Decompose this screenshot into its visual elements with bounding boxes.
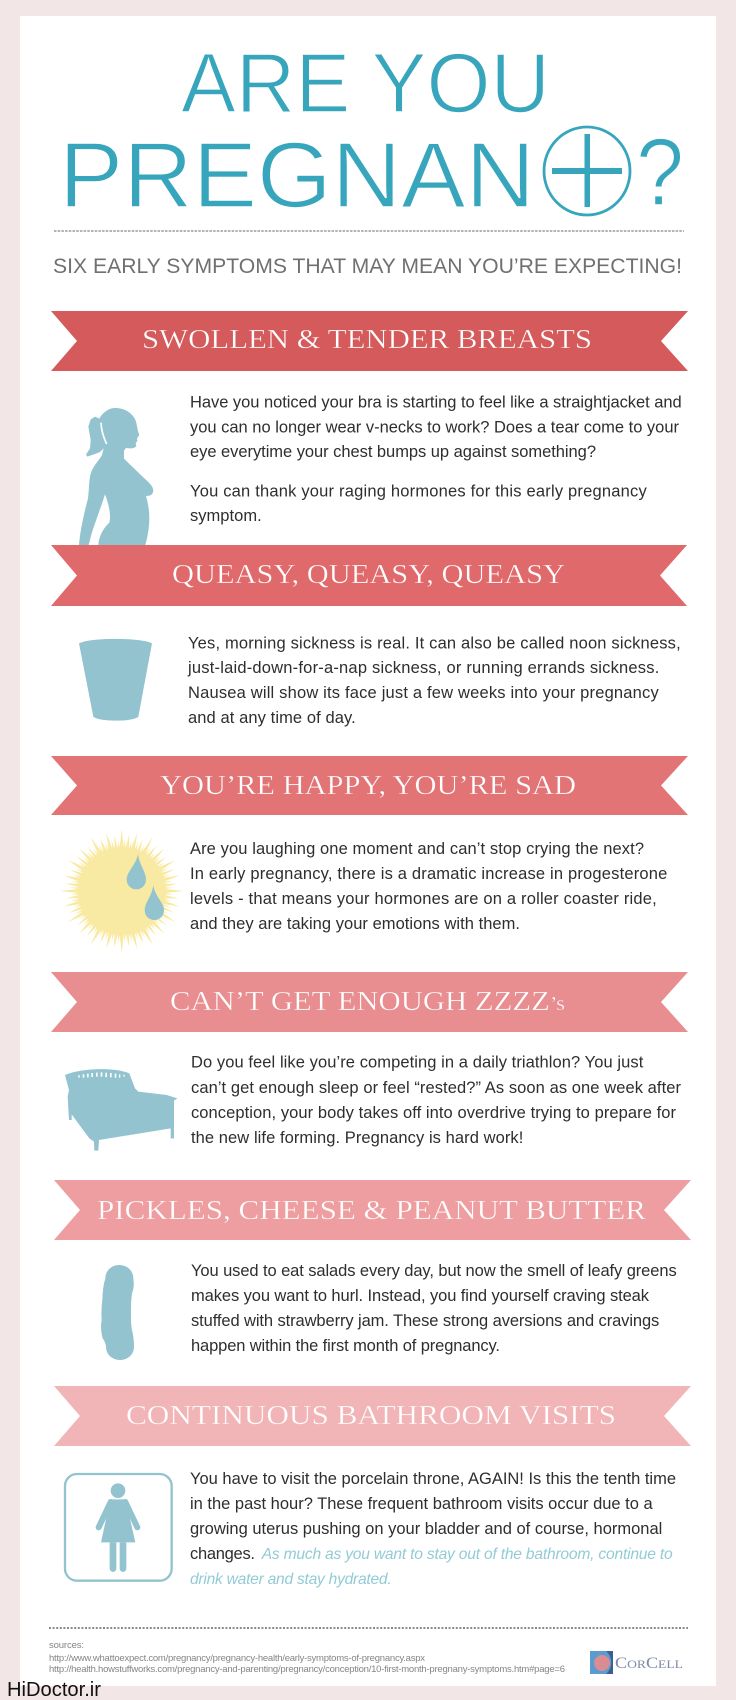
text block: Nausea will show its face just a few weeks into your pregnancy bbox=[188, 684, 659, 702]
text block bbox=[190, 1470, 676, 1588]
icon: pickle bbox=[101, 1265, 134, 1360]
tear drops bbox=[127, 854, 164, 920]
logo: CorCell bbox=[590, 1651, 683, 1674]
text block: eye everytime your chest bumps up against something? bbox=[190, 443, 596, 461]
text block: You can thank your raging hormones for this early pregnancy bbox=[190, 482, 647, 500]
text block bbox=[190, 840, 667, 933]
banner bbox=[54, 1386, 691, 1446]
text block bbox=[191, 1262, 677, 1355]
icon: plus in circle bbox=[544, 127, 630, 215]
logo: CorCell: CORCELL bbox=[615, 1655, 683, 1672]
text block: growing uterus pushing on your bladder and of course, hormonal bbox=[190, 1520, 662, 1538]
text block: and at any time of day. bbox=[188, 709, 356, 727]
text block: levels - that means your hormones are on a roller coaster ride, bbox=[190, 890, 657, 908]
banner: QUEASY, QUEASY, QUEASY bbox=[172, 559, 565, 589]
icon: cup bbox=[79, 639, 152, 721]
text block: in the past hour? These frequent bathroom visits occur due to a bbox=[190, 1495, 654, 1513]
text block bbox=[187, 634, 681, 727]
title: ? bbox=[636, 119, 684, 226]
panel: queasy bbox=[51, 545, 687, 727]
sources: sources: bbox=[49, 1640, 84, 1651]
icon: sun with tear drops bbox=[60, 829, 184, 953]
banner bbox=[51, 756, 688, 815]
icon: restroom sign bbox=[65, 1474, 172, 1581]
sources bbox=[49, 1640, 565, 1675]
banner bbox=[51, 545, 687, 606]
text block: Yes, morning sickness is real. It can also be called noon sickness, bbox=[188, 634, 681, 652]
text block: As much as you want to stay out of the bathroom, continue to bbox=[261, 1546, 673, 1563]
title: PREGNAN bbox=[59, 123, 535, 227]
panel: cravings bbox=[54, 1180, 691, 1360]
text block: symptom. bbox=[190, 507, 262, 525]
banner bbox=[54, 1180, 691, 1240]
text block: makes you want to hurl. Instead, you find yourself craving steak bbox=[191, 1287, 650, 1305]
panel: sleep bbox=[51, 972, 688, 1151]
sources: http://health.howstuffworks.com/pregnancy-and-parenting/pregnancy/conception/10-first-month-pregnany-symptoms.htm#page=6 bbox=[49, 1664, 565, 1675]
text block: you can no longer wear v-necks to work? Does a tear come to your bbox=[190, 418, 680, 436]
subtitle: SIX EARLY SYMPTOMS THAT MAY MEAN YOU’RE EXPECTING! bbox=[53, 255, 682, 278]
banner bbox=[51, 311, 688, 371]
title bbox=[59, 36, 684, 227]
banner bbox=[51, 972, 688, 1032]
sources: http://www.whattoexpect.com/pregnancy/pregnancy-health/early-symptoms-of-pregnancy.aspx bbox=[49, 1653, 425, 1664]
text block: and they are taking your emotions with them. bbox=[190, 915, 520, 933]
text block: changes. bbox=[190, 1545, 255, 1563]
text block: Do you feel like you’re competing in a daily triathlon? You just bbox=[191, 1054, 644, 1072]
text block: stuffed with strawberry jam. These strong aversions and cravings bbox=[191, 1312, 659, 1330]
banner: SWOLLEN & TENDER BREASTS bbox=[142, 324, 592, 354]
panel: happy and sad bbox=[51, 756, 688, 953]
text block bbox=[190, 394, 682, 525]
icon: pregnant silhouette bbox=[79, 408, 153, 545]
panel: swollen and tender breasts bbox=[51, 311, 688, 545]
text block: happen within the first month of pregnancy. bbox=[191, 1337, 500, 1355]
text block: can’t get enough sleep or feel “rested?” As soon as one week after bbox=[191, 1079, 682, 1097]
banner: YOU’RE HAPPY, YOU’RE SAD bbox=[160, 770, 576, 800]
banner: CONTINUOUS BATHROOM VISITS bbox=[126, 1400, 616, 1430]
text block: just-laid-down-for-a-nap sickness, or running errands sickness. bbox=[187, 659, 659, 677]
text block: You have to visit the porcelain throne, AGAIN! Is this the tenth time bbox=[190, 1470, 676, 1488]
sun bbox=[60, 829, 184, 953]
text block bbox=[191, 1054, 682, 1147]
title: ARE YOU bbox=[181, 36, 550, 130]
text block: Have you noticed your bra is starting to feel like a straightjacket and bbox=[190, 394, 682, 412]
icon: bed bbox=[65, 1069, 177, 1151]
banner: CAN’T GET ENOUGH ZZZZ ’s bbox=[170, 986, 565, 1016]
text block: drink water and stay hydrated. bbox=[190, 1571, 392, 1588]
banner: PICKLES, CHEESE & PEANUT BUTTER bbox=[97, 1195, 646, 1225]
panel: bathroom visits bbox=[54, 1386, 691, 1588]
text block: the new life forming. Pregnancy is hard work! bbox=[191, 1129, 523, 1147]
text block: You used to eat salads every day, but now the smell of leafy greens bbox=[191, 1262, 677, 1280]
text block: conception, your body takes off into overdrive trying to prepare for bbox=[191, 1104, 676, 1122]
text block: In early pregnancy, there is a dramatic increase in progesterone bbox=[190, 865, 667, 883]
text block: Are you laughing one moment and can’t stop crying the next? bbox=[190, 840, 644, 858]
